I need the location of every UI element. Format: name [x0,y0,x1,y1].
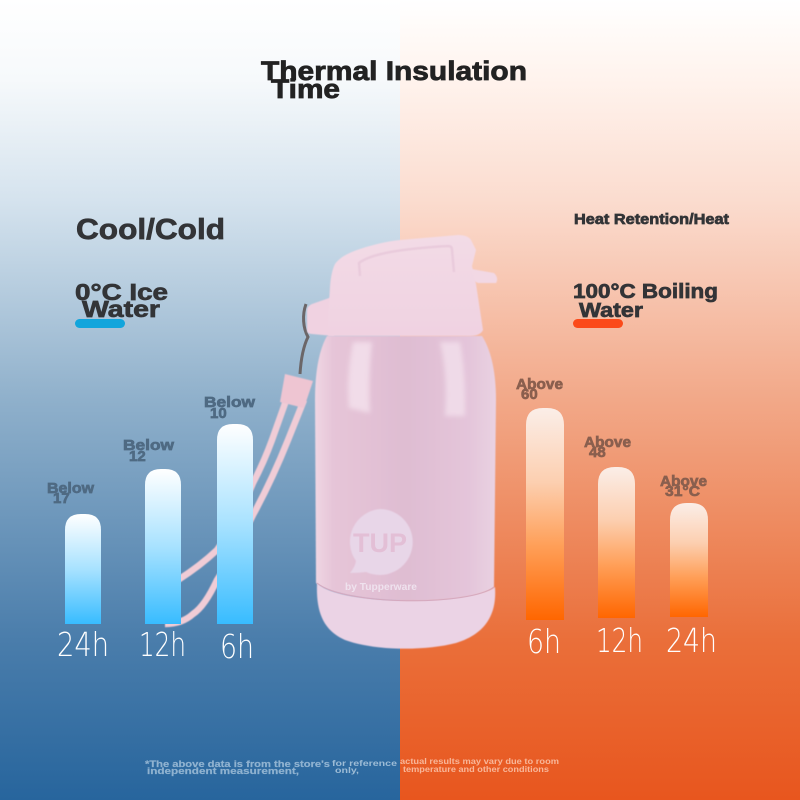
value 24h: 31°C [665,483,700,500]
value 6h: 10 [210,405,227,422]
footnote: only, [335,766,359,775]
bar 6h [217,424,253,624]
value 12h: Above [584,434,631,451]
subheading: boiling water [573,281,718,322]
bar 24h [65,514,101,624]
bar 24h [670,503,708,617]
title: Time [271,74,340,104]
value 6h: Above [516,376,563,393]
background: hot side [400,0,800,800]
brand text: by Tupperware [345,582,417,593]
body highlights [348,342,465,416]
subheading: boiling water: 100°C Boiling [573,281,718,303]
heading: heat retention: Heat Retention/Heat [574,212,729,228]
value 12h: 12 [129,448,146,465]
value 24h: 17 [53,490,70,507]
gray cord [300,304,308,374]
value 12h [584,434,631,461]
boiling water underline [573,319,623,328]
footnote [145,757,559,776]
footnote: for reference [332,759,398,768]
lid tab left [307,297,334,336]
bottle [300,235,497,649]
value 12h [123,437,174,465]
value 24h [47,480,94,507]
value 6h: Below [204,394,255,411]
value 6h [516,376,563,403]
value 24h: Above [660,473,707,490]
footnote: *The above data is from the store's [145,759,330,769]
ice water underline [75,319,125,328]
title [261,56,527,104]
label 6h: 6h [220,627,254,666]
seam line [317,583,494,601]
label 24h: 24h [57,625,109,664]
label 24h: 24h [666,621,717,660]
subheading: ice water: 0°C Ice [75,279,168,305]
bar 12h [145,469,181,624]
logo bubble: TUP [353,528,407,558]
bar 6h [526,408,564,620]
bottle strap [165,374,313,624]
bar 12h [598,467,635,618]
value 6h [204,394,255,422]
label 12h: 12h [139,625,186,664]
subheading: boiling water: Water [579,300,643,322]
label 12h: 12h [596,621,643,660]
bar chart: hot [516,376,717,661]
title: Thermal Insulation [261,56,527,86]
value 24h: Below [47,480,94,497]
footnote: actual results may vary due to room [400,757,559,766]
logo bubble [350,509,413,575]
heading: cool/cold: Cool/Cold [76,214,225,246]
footnote: temperature and other conditions [403,765,550,774]
lid recess [359,246,454,276]
bar chart: cold [47,394,255,666]
bottle body [315,336,496,601]
lid [328,235,483,336]
value 6h: 60 [521,386,538,403]
subheading: ice water: Water [82,296,160,322]
value 24h [660,473,707,500]
subheading: ice water [75,279,168,322]
bottle base [317,583,495,649]
label 6h: 6h [527,622,561,661]
footnote: independent measurement, [147,766,299,776]
value 12h: 48 [589,444,606,461]
value 12h: Below [123,437,174,454]
background: cold side [0,0,400,800]
lid tab right [466,268,497,283]
